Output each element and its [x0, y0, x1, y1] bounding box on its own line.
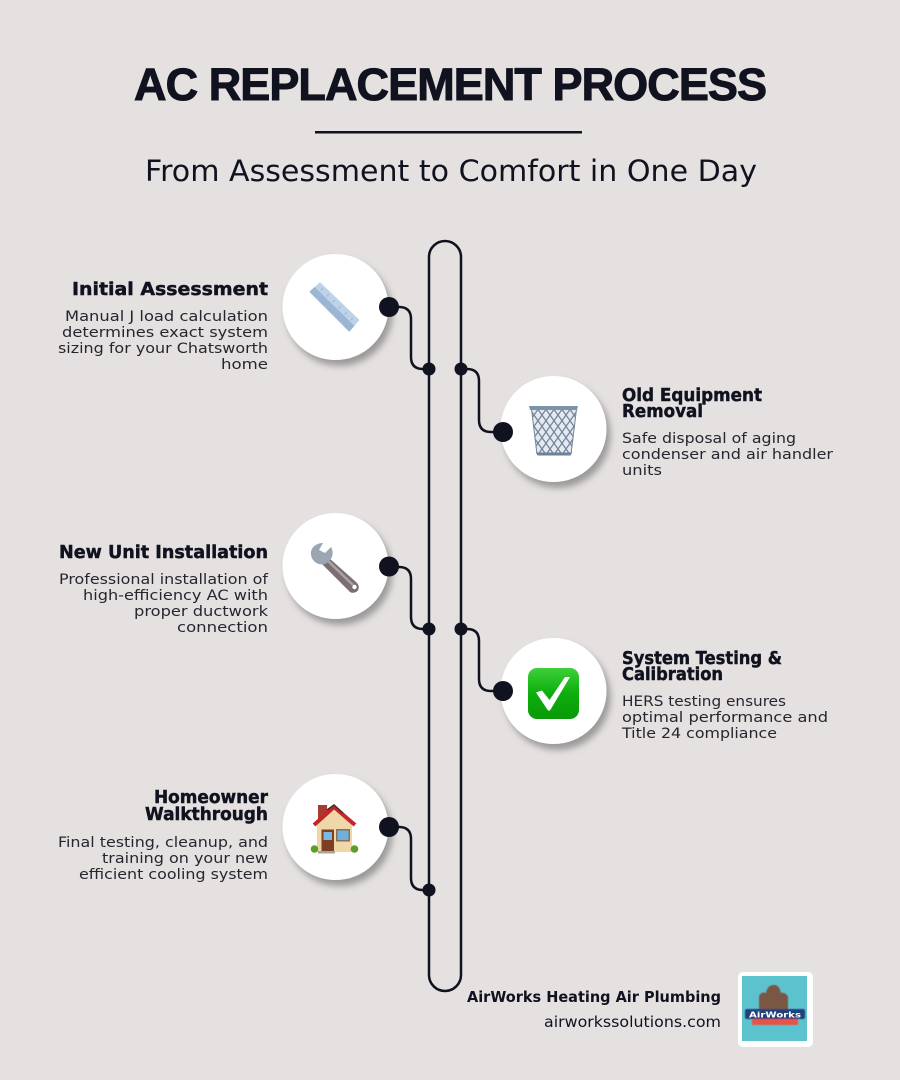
company name: AirWorks Heating Air Plumbing [467, 988, 721, 1006]
step 2 heading [622, 386, 762, 422]
step 4 heading [622, 649, 782, 685]
step 3: New Unit Installation [59, 513, 436, 636]
title: AC REPLACEMENT PROCESS [134, 59, 767, 110]
step 4 description: HERS testing ensures [622, 694, 786, 710]
footer brand [467, 972, 813, 1047]
step 4 icon circle [500, 638, 606, 744]
website: airworkssolutions.com [544, 1013, 721, 1031]
step 2: Old Equipment Removal [454, 362, 833, 482]
step 4 heading: System Testing & [622, 649, 782, 669]
step 2 description: Safe disposal of aging [622, 431, 796, 447]
step 3 description: proper ductwork [134, 604, 269, 620]
icon: wastebasket [529, 406, 578, 456]
step 1 dots [379, 297, 436, 376]
step 4: System Testing and Calibration [454, 622, 828, 744]
step 2 icon circle [500, 376, 606, 482]
step 1 connector [389, 307, 429, 369]
timeline pipe [429, 241, 461, 991]
step 5 dots [379, 817, 436, 896]
step 1 description: Manual J load calculation [65, 309, 268, 325]
step 2 heading: Old Equipment [622, 386, 762, 406]
step 3 heading: New Unit Installation [59, 543, 268, 563]
step 4 description [621, 694, 828, 742]
icon: check mark [528, 668, 579, 719]
step 2 connector [461, 369, 503, 432]
step 3 dots [379, 556, 436, 636]
step 5 heading [145, 788, 268, 825]
step 2 dots [454, 362, 513, 442]
step 5 connector [389, 827, 429, 890]
step 1 description: sizing for your Chatsworth [58, 341, 268, 357]
step 5 description: Final testing, cleanup, and [58, 835, 268, 851]
step 3 description: Professional installation of [59, 572, 269, 588]
step 2 heading: Removal [622, 402, 703, 422]
step 5 heading: Walkthrough [145, 805, 268, 825]
step 1 icon circle [282, 254, 388, 360]
step 3 icon circle [282, 513, 388, 619]
step 3 description: high-efficiency AC with [83, 588, 268, 604]
step 3 connector [389, 567, 429, 629]
step 5: Homeowner Walkthrough [58, 774, 436, 896]
icon: wrench [311, 543, 359, 593]
subtitle: From Assessment to Comfort in One Day [145, 154, 757, 188]
step 3 description [59, 572, 269, 636]
step 2 description: units [622, 463, 662, 479]
step 2 description: condenser and air handler [622, 447, 833, 463]
icon: ruler [309, 282, 359, 332]
icon: house [311, 805, 358, 854]
step 4 heading: Calibration [622, 665, 723, 685]
step 1: Initial Assessment [58, 254, 436, 376]
step 2 description [622, 431, 833, 479]
step 5 description: efficient cooling system [79, 867, 268, 883]
step 4 connector [461, 629, 503, 691]
step 1 description [58, 309, 268, 373]
step 5 description [58, 835, 268, 883]
step 1 description: home [221, 357, 268, 373]
step 4 dots [454, 622, 513, 701]
step 1 description: determines exact system [62, 325, 268, 341]
logo [738, 972, 813, 1047]
step 4 description: optimal performance and [622, 710, 828, 726]
step 4 description: Title 24 compliance [621, 726, 777, 742]
step 3 description: connection [177, 620, 268, 636]
logo: AirWorks [749, 1010, 801, 1020]
step 5 heading: Homeowner [154, 788, 268, 808]
step 5 description: training on your new [102, 851, 268, 867]
step 1 heading: Initial Assessment [72, 280, 268, 300]
step 5 icon circle [282, 774, 388, 880]
